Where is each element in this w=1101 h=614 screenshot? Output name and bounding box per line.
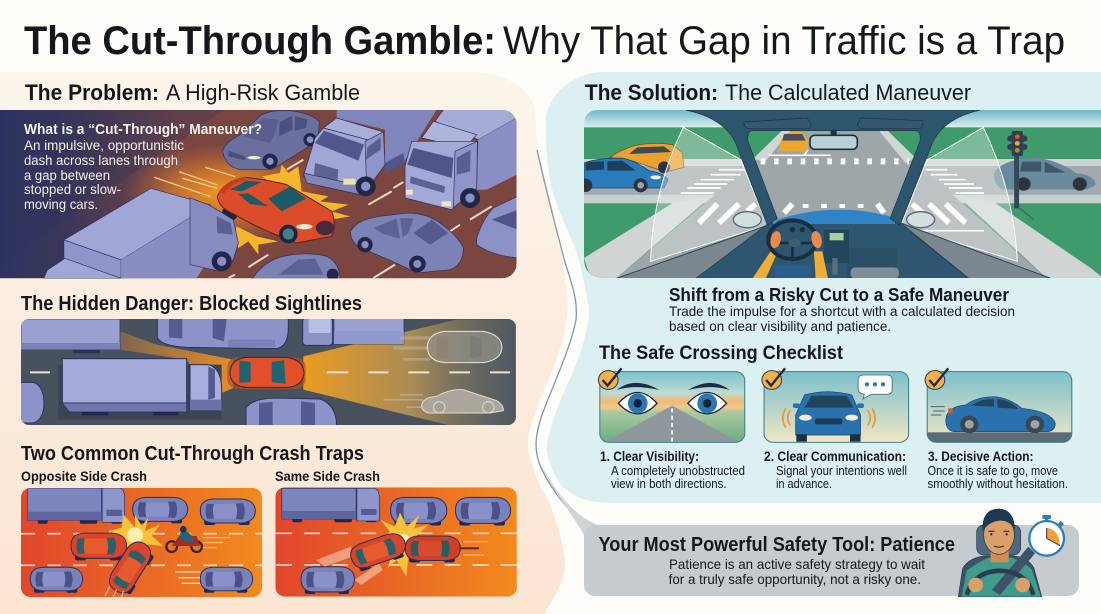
heading: safe crossing checklist: The Safe Crossing Checklist [599, 343, 844, 364]
checklist card: clear visibility [598, 368, 745, 442]
heading: hidden danger: The Hidden Danger: Blocked Sightlines [21, 293, 362, 315]
title: Why That Gap in Traffic is a Trap [503, 19, 1065, 63]
icon: stopwatch [1029, 515, 1064, 556]
starburst [233, 165, 350, 255]
checklist card: decisive action [925, 368, 1072, 442]
callout: what is a cut-through maneuver: What is a “Cut-Through” Maneuver? [24, 122, 262, 138]
heading: patience: Your Most Powerful Safety Tool: Patience [598, 534, 955, 556]
car: red [227, 357, 306, 389]
checklist text: clear communication: 2. Clear Communication: [764, 448, 906, 464]
car: ghost approaching bottom [383, 390, 503, 413]
illustration: car cutting through stopped traffic [0, 110, 520, 281]
diagram: same side crash [275, 487, 517, 597]
truck: right [405, 110, 517, 210]
checklist text: clear communication: Signal your intentions well [776, 463, 907, 478]
truck: upper left [21, 319, 120, 353]
checklist text: decisive action: smoothly without hesitation. [928, 476, 1068, 491]
truck: front left cab [190, 198, 238, 271]
callout: what is a cut-through maneuver [24, 122, 262, 212]
checklist text: clear visibility [600, 448, 745, 491]
car: right sedan [351, 213, 463, 273]
car interior [616, 110, 1052, 279]
heading: the problem: The Problem: [25, 80, 159, 105]
checklist card: clear communication [762, 368, 909, 442]
panel: the hidden danger [20, 293, 517, 426]
panel: crash traps [21, 443, 517, 598]
heading: the solution [585, 80, 971, 105]
diagram: blocked sightlines top view [20, 318, 517, 426]
text: patience body: for a truly safe opportunity, not a risky one. [669, 571, 921, 587]
car: bottom [252, 254, 340, 281]
panel: the problem [0, 72, 568, 614]
diagram: opposite side crash [21, 488, 262, 598]
truck: front left box [44, 188, 211, 278]
text: patience body: Patience is an active safety strategy to wait [669, 556, 925, 572]
checklist text: clear communication [764, 448, 907, 491]
panel: the solution [536, 72, 1101, 535]
heading: crash traps: Two Common Cut-Through Crash Traps [21, 443, 364, 465]
car: upper middle [157, 318, 288, 349]
title: The Cut-Through Gamble: [24, 19, 496, 63]
checklist text: decisive action: Once it is safe to go, move [928, 463, 1058, 478]
illustration: driver's view of the intersection [579, 110, 1101, 279]
car: blue left [579, 158, 668, 192]
callout: what is a cut-through maneuver: moving cars. [24, 196, 98, 212]
car: lower middle [246, 398, 337, 426]
heading: the problem [25, 80, 360, 105]
car: far right [477, 195, 520, 258]
truck: middle [303, 110, 437, 196]
heading: the solution: The Solution: [585, 80, 718, 105]
subheading: opposite side crash: Opposite Side Crash [21, 468, 147, 484]
checklist text: clear visibility: view in both directions. [611, 476, 726, 491]
car: ghost approaching top [393, 331, 502, 363]
subheading: same side crash: Same Side Crash [275, 468, 380, 484]
vision fan: right [901, 127, 1017, 261]
checklist text: clear visibility: A completely unobstructed [611, 463, 745, 478]
traffic light [1007, 131, 1033, 219]
text: patience body [669, 556, 925, 587]
checklist text: clear communication: in advance. [776, 476, 832, 491]
text: shift from a risky cut: Trade the impulse for a shortcut with a calculated decision [669, 303, 1015, 319]
callout: what is a cut-through maneuver: a gap between [24, 167, 110, 183]
car: top grey sedan [223, 110, 319, 170]
callout: what is a cut-through maneuver: stopped or slow- [24, 181, 121, 197]
callout: what is a cut-through maneuver: dash across lanes through [24, 152, 178, 168]
truck: upper right [303, 318, 404, 345]
panel: patience [584, 509, 1079, 597]
checklist text: decisive action: 3. Decisive Action: [928, 448, 1034, 464]
car: yellow far [779, 131, 808, 151]
text: shift from a risky cut [669, 285, 1015, 334]
text: shift from a risky cut: based on clear visibility and patience. [669, 318, 891, 334]
car: lower left [20, 382, 44, 423]
heading: the problem: A High-Risk Gamble [166, 80, 360, 105]
heading: the solution: The Calculated Maneuver [725, 80, 971, 105]
red car [217, 176, 334, 243]
callout: what is a cut-through maneuver: An impulsive, opportunistic [24, 137, 184, 153]
car: grey right [994, 157, 1096, 191]
title [24, 19, 1065, 63]
vision fan: left [651, 127, 767, 261]
text: shift from a risky cut: Shift from a Risky Cut to a Safe Maneuver [669, 285, 1009, 305]
icon: driver at steering wheel [958, 509, 1042, 597]
checklist text: decisive action [928, 448, 1068, 491]
car: orange left [610, 143, 684, 173]
truck: center [62, 359, 222, 415]
motorcycle [166, 526, 230, 552]
checklist text: clear visibility: 1. Clear Visibility: [600, 448, 699, 464]
